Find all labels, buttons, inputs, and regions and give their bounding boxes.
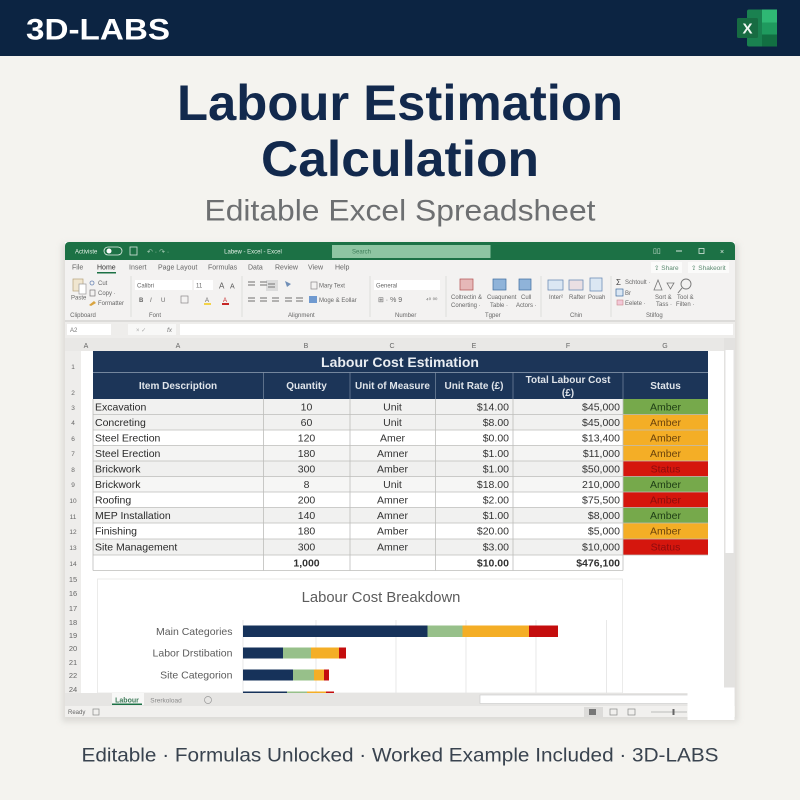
ribbon font group: A bbox=[219, 282, 225, 290]
title bar: Labew - Excel - Excel bbox=[224, 250, 282, 256]
bar: site categories bbox=[160, 670, 329, 682]
title bar: ▯▯ bbox=[653, 248, 661, 255]
window shadow bbox=[62, 244, 738, 722]
ribbon tabs: Page Layout bbox=[158, 264, 197, 272]
bar: labor distribution bbox=[153, 648, 346, 660]
icon: Excel logo: X bbox=[742, 20, 753, 38]
table header row: Item Description bbox=[139, 381, 217, 392]
ribbon tabs: File bbox=[72, 264, 83, 272]
ribbon: Moge & Eollar bbox=[319, 298, 357, 304]
status labels: Amber bbox=[650, 479, 681, 491]
unit rates: $1.00 bbox=[483, 464, 509, 476]
item descriptions: Steel Erection bbox=[95, 432, 161, 444]
unit rates: $2.00 bbox=[483, 494, 509, 506]
ribbon clipboard group: Clipboard bbox=[70, 313, 96, 319]
quantities: 180 bbox=[298, 448, 315, 460]
unit rates: $1.00 bbox=[483, 448, 509, 460]
ribbon styles group: Cull bbox=[521, 295, 531, 301]
ribbon cells group: Chin bbox=[570, 313, 582, 319]
units: Unit bbox=[383, 479, 402, 491]
title: Calculation bbox=[261, 131, 539, 187]
ribbon styles group: Table · bbox=[490, 303, 508, 309]
ribbon editing group: Filten · bbox=[676, 302, 694, 308]
units: Amber bbox=[377, 464, 408, 476]
ribbon font group: A bbox=[230, 284, 235, 290]
row headers: 15 bbox=[69, 575, 77, 584]
column headers: F bbox=[566, 343, 570, 350]
ribbon editing group: Tool & bbox=[677, 295, 694, 301]
ribbon styles group: Conerting · bbox=[451, 303, 481, 309]
status bar: Ready bbox=[68, 710, 85, 716]
column headers: A bbox=[84, 343, 89, 350]
table title row bbox=[93, 351, 708, 372]
row headers: 10 bbox=[69, 498, 77, 505]
units: Amner bbox=[377, 494, 408, 506]
spreadsheet window bbox=[65, 242, 735, 717]
footer caption: Editable · Formulas Unlocked · Worked Example Included · 3D-LABS bbox=[82, 744, 718, 766]
table header row: Unit Rate (£) bbox=[445, 381, 503, 392]
chart title: Labour Cost Breakdown bbox=[302, 590, 460, 606]
bar: labor distribution: Labor Drstibation bbox=[153, 648, 233, 660]
unit rates: $20.00 bbox=[477, 526, 509, 538]
formula bar: fx bbox=[167, 327, 173, 334]
ribbon editing group: Tass · bbox=[656, 302, 672, 308]
ribbon font group: 11 bbox=[196, 284, 203, 290]
total costs: $75,500 bbox=[582, 494, 620, 506]
units: Amner bbox=[377, 510, 408, 522]
ribbon tabs: Insert bbox=[129, 264, 147, 272]
title bar: Search bbox=[352, 250, 371, 256]
status labels: Amber bbox=[650, 432, 681, 444]
title bar: Activiste bbox=[75, 250, 98, 256]
units: Amner bbox=[377, 448, 408, 460]
column headers: B bbox=[304, 343, 309, 350]
row headers: 19 bbox=[69, 631, 77, 640]
quantities: 140 bbox=[298, 510, 315, 522]
row headers: 1 bbox=[71, 364, 75, 371]
table header row: (£) bbox=[562, 388, 574, 399]
formula bar: × ✓ bbox=[136, 328, 146, 334]
status labels: Status bbox=[651, 542, 680, 554]
ribbon cells group: Inter² bbox=[549, 295, 563, 301]
quantities: 1,000 bbox=[293, 558, 320, 570]
units: Unit bbox=[383, 402, 402, 414]
status labels bbox=[650, 402, 681, 554]
ribbon clipboard group: Cut bbox=[98, 281, 108, 287]
ribbon styles group: Actors · bbox=[516, 303, 537, 309]
status labels: Amber bbox=[650, 526, 681, 538]
total costs: $11,000 bbox=[583, 448, 620, 460]
status cells bbox=[623, 399, 708, 555]
ribbon number group: ⁴⁰ ⁰⁰ bbox=[426, 297, 438, 304]
units: Amner bbox=[377, 542, 408, 554]
table header row: Unit of Measure bbox=[355, 381, 430, 392]
unit rates bbox=[477, 402, 509, 570]
ribbon: ⇪ Shakeorit bbox=[691, 264, 726, 272]
cost table: Labour Cost Estimation bbox=[321, 354, 479, 370]
row headers: 9 bbox=[71, 482, 75, 489]
row headers: 16 bbox=[69, 589, 77, 598]
column headers: E bbox=[472, 343, 477, 350]
unit rates: $0.00 bbox=[483, 432, 509, 444]
row headers: 18 bbox=[69, 618, 77, 627]
ribbon cells group: Pouah bbox=[588, 295, 605, 301]
ribbon alignment group bbox=[248, 280, 303, 301]
bar: main categories: Main Categories bbox=[156, 626, 232, 638]
total costs: $5,000 bbox=[588, 526, 620, 538]
subtitle: Editable Excel Spreadsheet bbox=[204, 194, 596, 228]
ribbon styles group bbox=[451, 279, 537, 319]
row headers: 20 bbox=[69, 644, 77, 653]
status labels: Amber bbox=[650, 448, 681, 460]
ribbon font group: Calibri bbox=[137, 284, 154, 290]
item descriptions bbox=[95, 402, 177, 554]
brand name: 3D-LABS bbox=[26, 14, 170, 46]
ribbon clipboard group: Paste bbox=[71, 296, 87, 302]
ribbon tabs bbox=[72, 264, 350, 274]
item descriptions: Brickwork bbox=[95, 464, 141, 476]
ribbon styles group: Tgper bbox=[485, 313, 501, 319]
quantities: 120 bbox=[298, 432, 315, 444]
ribbon font group: A bbox=[205, 298, 209, 304]
item descriptions: MEP Installation bbox=[95, 510, 171, 522]
quantities: 300 bbox=[298, 464, 315, 476]
quantities bbox=[293, 402, 320, 570]
title bar bbox=[65, 242, 735, 260]
total costs: $13,400 bbox=[582, 432, 620, 444]
column headers: C bbox=[389, 343, 395, 350]
bar chart: labour cost breakdown bbox=[98, 579, 622, 693]
ribbon clipboard group: Copy · bbox=[98, 291, 116, 297]
ribbon tabs: Formulas bbox=[208, 264, 238, 272]
ribbon: Alignment bbox=[288, 313, 315, 319]
ribbon font group bbox=[135, 280, 235, 319]
item descriptions: Roofing bbox=[95, 494, 131, 506]
ribbon tabs: Home bbox=[97, 264, 116, 272]
ribbon font group: B bbox=[139, 298, 144, 304]
ribbon number group: General bbox=[376, 284, 397, 290]
white corner patch bbox=[688, 688, 734, 720]
quantities: 180 bbox=[298, 526, 315, 538]
units: Amber bbox=[377, 526, 408, 538]
unit rates: $14.00 bbox=[477, 402, 509, 414]
ribbon styles group: Coltrectin & bbox=[451, 295, 482, 301]
status labels: Amber bbox=[650, 402, 681, 414]
total costs: $50,000 bbox=[582, 464, 620, 476]
column headers: A bbox=[176, 343, 181, 350]
ribbon tabs: Data bbox=[248, 264, 263, 272]
total costs: $476,100 bbox=[576, 558, 620, 570]
ribbon: ⇪ Share bbox=[654, 264, 679, 272]
row headers: 13 bbox=[69, 545, 77, 552]
sheet tabs bbox=[65, 693, 735, 706]
table row backgrounds bbox=[93, 399, 623, 570]
row headers bbox=[65, 351, 81, 694]
ribbon editing group bbox=[616, 278, 694, 319]
ribbon number group: Number bbox=[395, 313, 416, 319]
row headers: 2 bbox=[71, 390, 75, 397]
quantities: 200 bbox=[298, 494, 315, 506]
units: Amer bbox=[380, 432, 406, 444]
row headers: 21 bbox=[69, 658, 77, 667]
unit rates: $3.00 bbox=[483, 542, 509, 554]
ribbon tabs: Help bbox=[335, 264, 350, 272]
status labels: Amber bbox=[650, 510, 681, 522]
ribbon tabs: Review bbox=[275, 264, 299, 272]
quantities: 8 bbox=[304, 479, 310, 491]
row headers: 17 bbox=[69, 604, 77, 613]
sheet tabs: Srerkoload bbox=[150, 698, 182, 704]
column headers bbox=[65, 338, 725, 351]
ribbon clipboard group bbox=[70, 279, 124, 319]
row headers: 24 bbox=[69, 685, 77, 694]
item descriptions: Site Management bbox=[95, 542, 177, 554]
unit rates: $10.00 bbox=[477, 558, 509, 570]
ribbon cells group: Rafter bbox=[569, 295, 585, 301]
ribbon number group bbox=[374, 280, 440, 319]
row headers: 7 bbox=[71, 451, 75, 458]
row headers: 12 bbox=[69, 529, 77, 536]
table header row: Total Labour Cost bbox=[526, 375, 611, 386]
total costs bbox=[576, 402, 620, 570]
total costs: $45,000 bbox=[582, 417, 620, 429]
total costs: $45,000 bbox=[582, 402, 620, 414]
table grid bbox=[93, 399, 708, 570]
ribbon font group: U bbox=[161, 298, 165, 304]
item descriptions: Finishing bbox=[95, 526, 137, 538]
icon: Excel logo bbox=[737, 10, 777, 46]
bar: site categories: Site Categorion bbox=[160, 670, 233, 682]
row headers: 11 bbox=[70, 514, 77, 521]
title bbox=[177, 75, 623, 187]
ribbon tabs: View bbox=[308, 264, 324, 272]
top banner bbox=[0, 0, 800, 56]
total costs: $8,000 bbox=[588, 510, 620, 522]
unit rates: $8.00 bbox=[483, 417, 509, 429]
ribbon number group: ⊞ · % 9 bbox=[378, 297, 402, 304]
total costs: $10,000 bbox=[582, 542, 620, 554]
item descriptions: Brickwork bbox=[95, 479, 141, 491]
total costs: 210,000 bbox=[582, 479, 620, 491]
row headers: 4 bbox=[71, 420, 75, 427]
item descriptions: Excavation bbox=[95, 402, 147, 414]
ribbon editing group: Sort & bbox=[655, 295, 672, 301]
unit rates: $18.00 bbox=[477, 479, 509, 491]
vertical scrollbar bbox=[724, 338, 735, 693]
ribbon cells group bbox=[548, 278, 605, 319]
title bar: × bbox=[720, 249, 724, 256]
ribbon font group: A bbox=[223, 298, 227, 304]
row headers: 8 bbox=[71, 467, 75, 474]
column headers: G bbox=[662, 343, 668, 350]
bar: clipped fourth row bbox=[243, 692, 334, 693]
ribbon editing group: Eelete · bbox=[625, 301, 646, 307]
title: Labour Estimation bbox=[177, 75, 623, 131]
row headers: 14 bbox=[69, 561, 77, 568]
units: Unit bbox=[383, 417, 402, 429]
quantities: 10 bbox=[301, 402, 312, 414]
row headers: 3 bbox=[71, 405, 75, 412]
ribbon font group: Font bbox=[149, 313, 161, 319]
formula bar bbox=[65, 322, 735, 338]
row headers: 22 bbox=[69, 671, 77, 680]
search box bbox=[332, 245, 490, 258]
item descriptions: Steel Erection bbox=[95, 448, 161, 460]
formula bar: A2 bbox=[70, 328, 78, 334]
cost table bbox=[93, 351, 708, 570]
table header row bbox=[93, 372, 708, 399]
table header row: Status bbox=[650, 381, 681, 392]
ribbon editing group: Stilfog bbox=[646, 313, 663, 319]
status labels: Amber bbox=[650, 417, 681, 429]
status labels: Amber bbox=[650, 494, 681, 506]
ribbon styles group: Cuaqunent bbox=[487, 295, 517, 301]
units bbox=[377, 402, 408, 554]
row headers: 6 bbox=[71, 436, 75, 443]
ribbon clipboard group: Formatter bbox=[98, 301, 124, 307]
item descriptions: Concreting bbox=[95, 417, 146, 429]
unit rates: $1.00 bbox=[483, 510, 509, 522]
ribbon font group: I bbox=[150, 298, 152, 304]
quantities: 60 bbox=[301, 417, 312, 429]
table header row: Quantity bbox=[286, 381, 327, 392]
ribbon: Mary Text bbox=[319, 284, 345, 290]
status labels: Status bbox=[651, 464, 680, 476]
status bar bbox=[65, 706, 735, 717]
bar: main categories bbox=[156, 626, 558, 638]
title bar: ↶ · ↷ · bbox=[147, 249, 169, 256]
ribbon editing group: Schtoult · bbox=[625, 280, 650, 286]
ribbon editing group: Σ bbox=[616, 278, 621, 287]
ribbon bbox=[65, 260, 735, 322]
ribbon editing group: Br bbox=[625, 291, 631, 297]
sheet tabs: Labour bbox=[115, 698, 139, 704]
quantities: 300 bbox=[298, 542, 315, 554]
